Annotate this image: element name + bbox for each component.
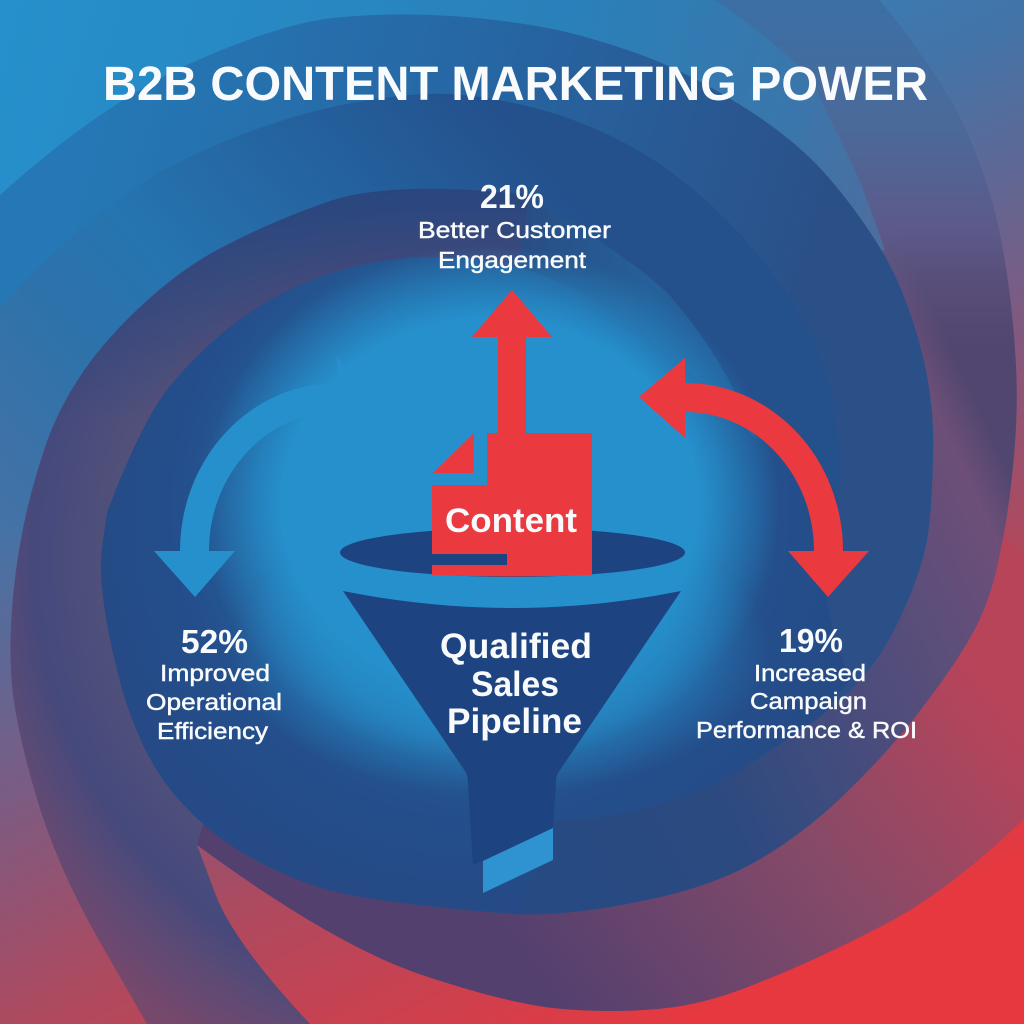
content document icon: [432, 433, 592, 576]
funnel opening: [340, 528, 685, 577]
stat: 52% improved operational efficiency: [146, 623, 282, 744]
stat: 52% improved operational efficiency: 52%: [181, 623, 248, 660]
stat: 21% better customer engagement: Better Customer: [418, 217, 611, 243]
stat: 21% better customer engagement: [418, 178, 611, 273]
stat: 21% better customer engagement: 21%: [480, 178, 544, 215]
document line: [432, 554, 507, 565]
funnel spout: [483, 828, 553, 893]
funnel label: Pipeline: [447, 702, 582, 741]
stat: 19% increased campaign performance and ROI: Performance & ROI: [696, 717, 917, 743]
stat: 21% better customer engagement: Engagement: [438, 247, 587, 273]
stat: 19% increased campaign performance and ROI: Campaign: [750, 688, 867, 714]
stat: 52% improved operational efficiency: Operational: [146, 689, 282, 715]
document body: [432, 433, 592, 576]
title: B2B CONTENT MARKETING POWER: [103, 58, 928, 111]
funnel label: Sales: [471, 665, 559, 704]
funnel body: [343, 591, 681, 865]
arrow: red curved arrow to the right stat: [639, 358, 869, 597]
document folded corner: [433, 433, 474, 473]
funnel label: Qualified: [440, 627, 592, 666]
stat: 19% increased campaign performance and ROI: Increased: [754, 660, 866, 686]
funnel rim: [340, 536, 684, 608]
stat: 19% increased campaign performance and ROI: [696, 622, 917, 743]
stat: 19% increased campaign performance and ROI: 19%: [779, 622, 843, 659]
stat: 52% improved operational efficiency: Efficiency: [157, 718, 269, 744]
funnel label: [440, 627, 592, 741]
document label: Content: [445, 502, 577, 540]
stat: 52% improved operational efficiency: Improved: [160, 660, 270, 686]
arrow: blue curved arrow to the left stat: [154, 357, 376, 597]
funnel: [340, 528, 685, 893]
arrow: red up arrow: [472, 290, 552, 440]
